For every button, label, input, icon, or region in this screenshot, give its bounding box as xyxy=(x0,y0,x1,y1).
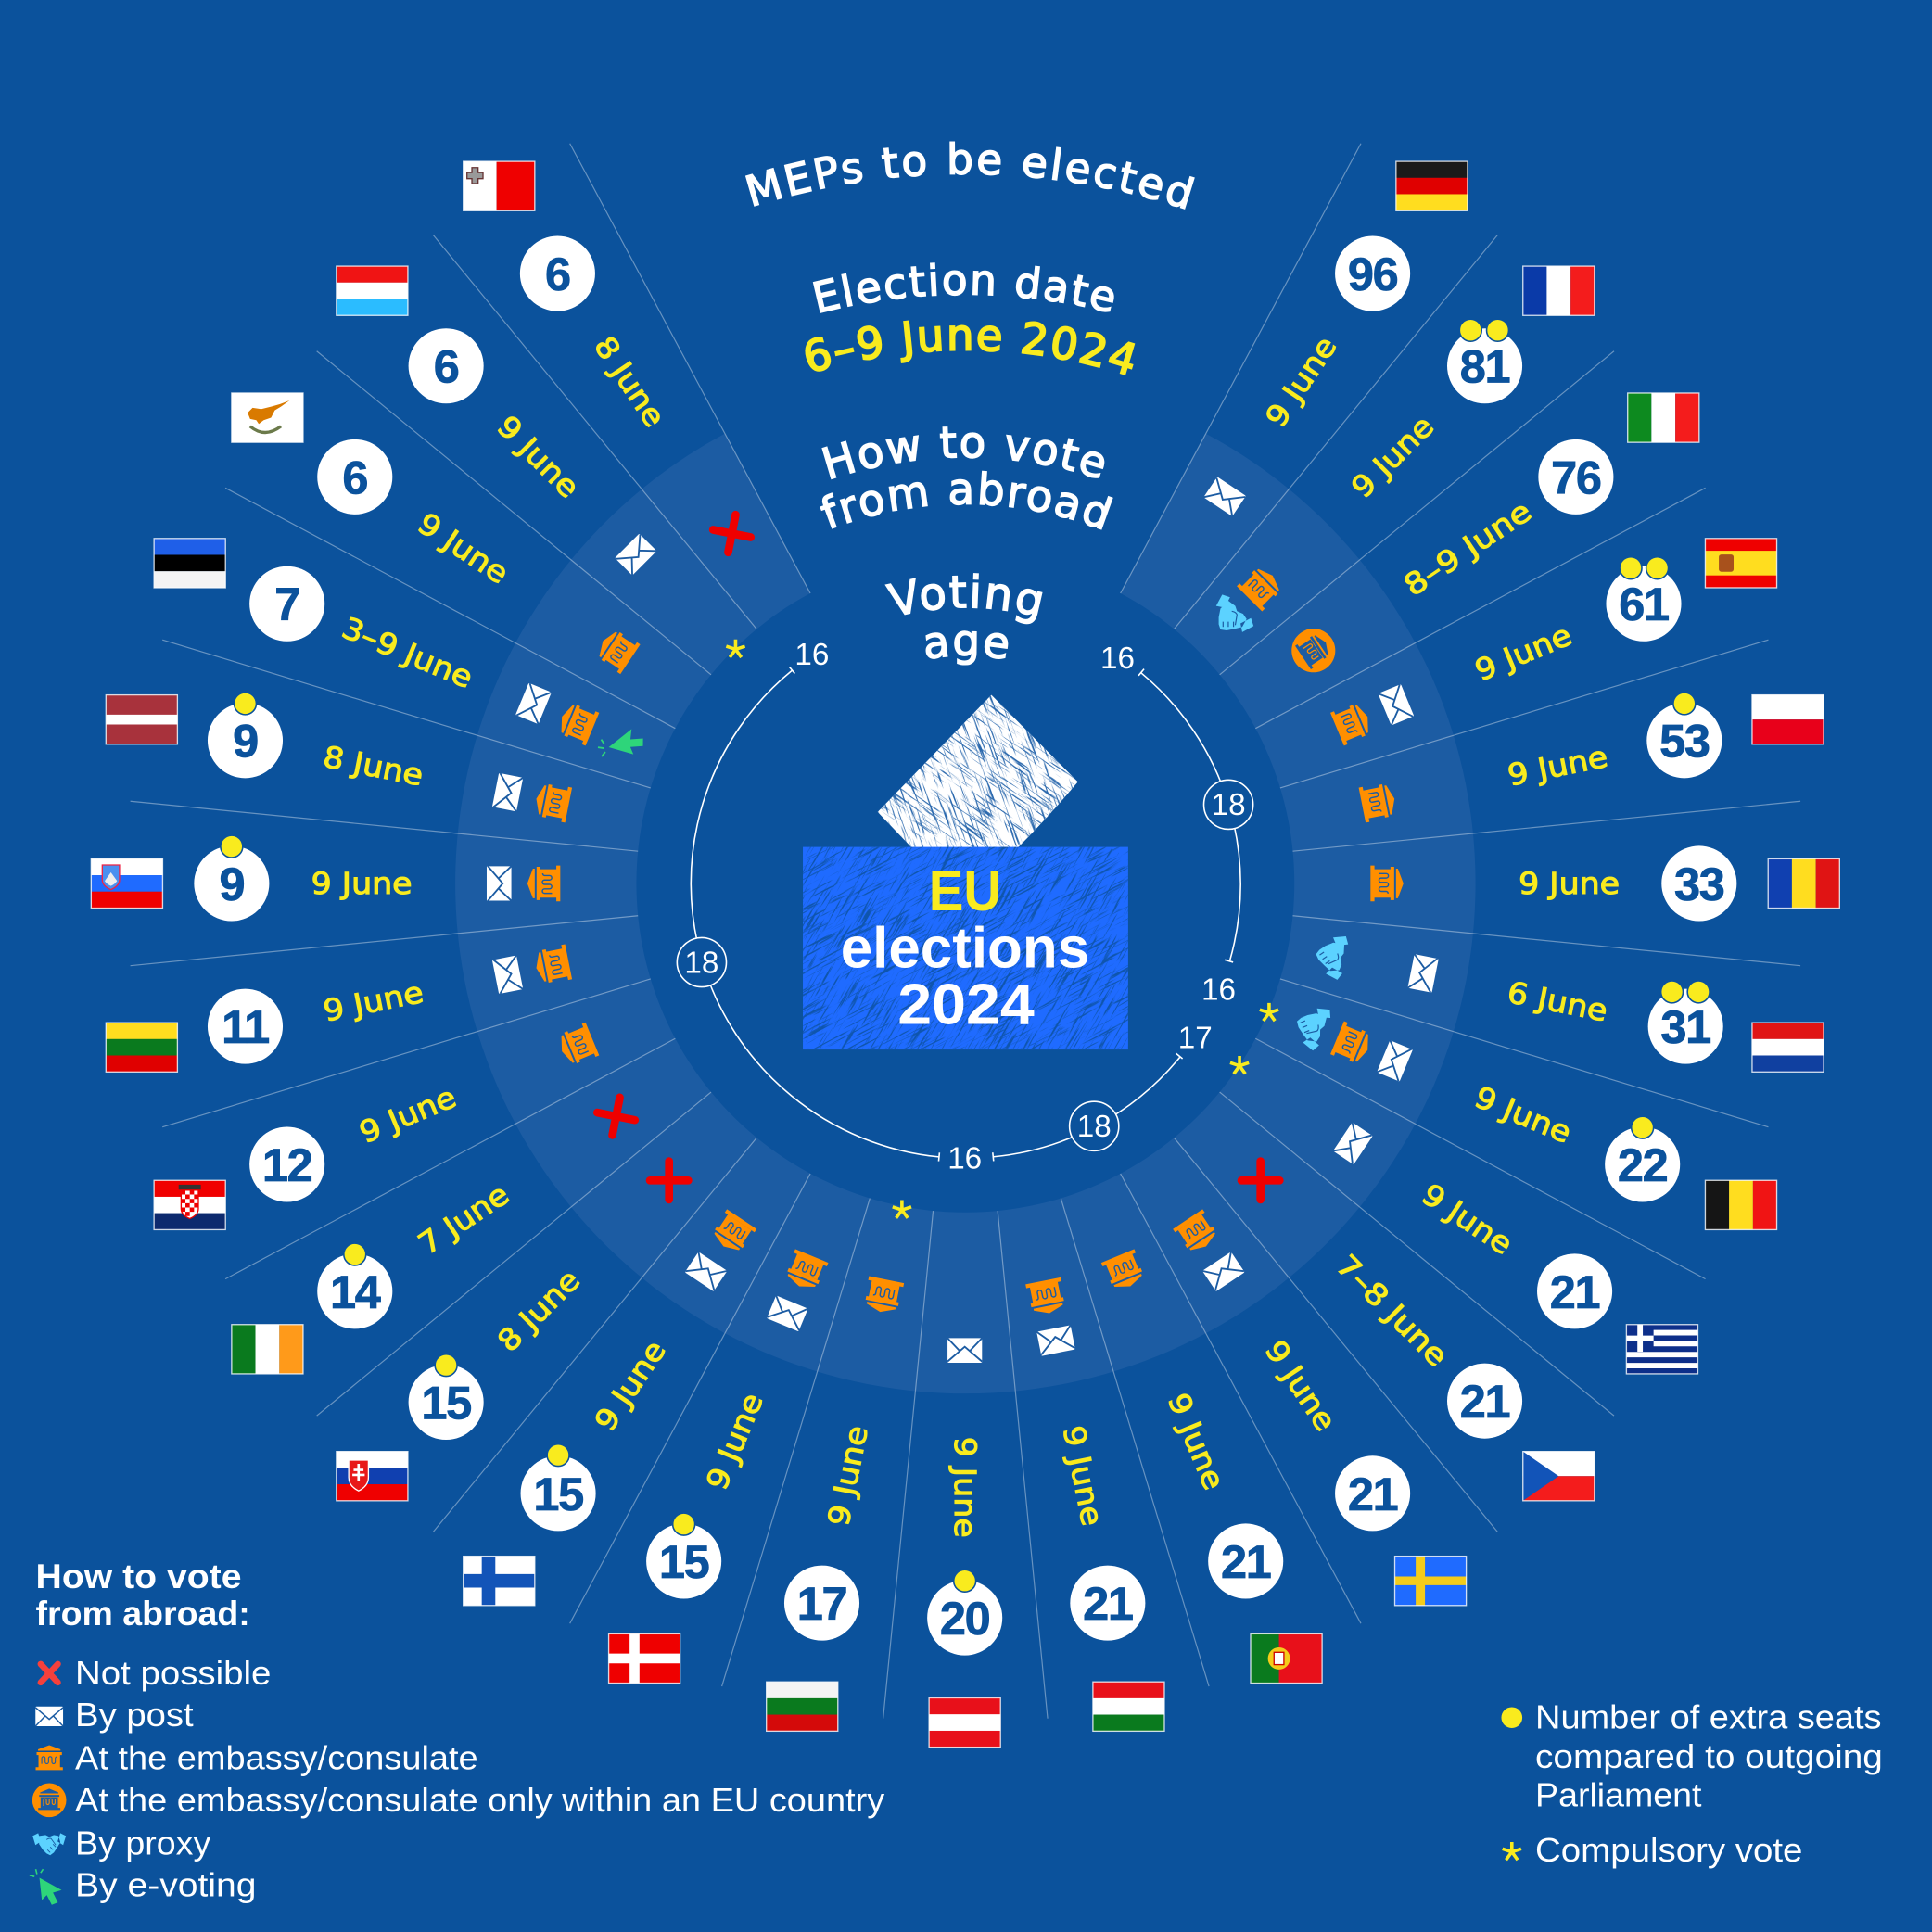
legend heading xyxy=(36,1557,250,1633)
icon: not possible xyxy=(713,515,751,553)
flag: Cyprus xyxy=(232,393,303,442)
wedge: Portugal xyxy=(1101,1249,1322,1684)
extra seat xyxy=(673,1513,695,1535)
seats: 11 xyxy=(208,989,283,1064)
flag: Spain xyxy=(1705,539,1777,588)
seats: 9: 9 xyxy=(233,715,258,768)
icon: embassy xyxy=(1237,563,1285,612)
icon: by post xyxy=(1377,1040,1413,1082)
age label 16: 16 xyxy=(1100,642,1135,676)
seats: 96: 96 xyxy=(1348,248,1398,300)
wedge: Bulgaria xyxy=(767,1201,911,1731)
heading: MEPs to be elected: MEPs to be elected xyxy=(745,141,1195,210)
age badge 18 xyxy=(1204,780,1253,829)
heading: Election date: Election date xyxy=(812,262,1114,313)
wedge: Belgium xyxy=(1260,999,1777,1229)
legend heading: How to vote xyxy=(36,1557,241,1595)
age badge 18: 18 xyxy=(1077,1110,1112,1144)
age badge 18: 18 xyxy=(684,946,718,980)
age label 17: 17 xyxy=(1178,1021,1213,1055)
voting age arc chart xyxy=(677,638,1253,1176)
icon: by post xyxy=(492,955,523,994)
seats: 53: 53 xyxy=(1659,715,1710,768)
date: 9 June: 9 June xyxy=(490,409,587,505)
icon: embassy xyxy=(782,1249,828,1293)
box title: EU elections 2024: 2024 xyxy=(897,973,1035,1037)
flag: Estonia xyxy=(154,539,225,588)
legend item: compulsory vote: Compulsory vote xyxy=(1535,1832,1802,1869)
icon: embassy xyxy=(1101,1249,1147,1293)
wedge: Ireland xyxy=(232,1098,635,1374)
seats: 22 xyxy=(1605,1126,1680,1202)
age label 16: 16 xyxy=(1201,973,1236,1008)
icon: not possible xyxy=(597,1098,635,1135)
seats: 61: 61 xyxy=(1619,578,1669,630)
wedge: Sweden xyxy=(1173,1209,1467,1606)
seats: 6 xyxy=(317,439,392,515)
date: 9 June: 9 June xyxy=(1416,1176,1519,1262)
box title: EU elections 2024 xyxy=(841,859,1089,1037)
seats: 33 xyxy=(1661,845,1736,921)
wedge: Cyprus xyxy=(232,393,641,674)
legend item: by proxy: By proxy xyxy=(75,1824,210,1862)
seats: 20: 20 xyxy=(940,1592,990,1645)
flag: Slovenia xyxy=(91,858,162,909)
seats: 76: 76 xyxy=(1551,451,1601,503)
date: 9 June: 9 June xyxy=(1344,409,1441,505)
seats: 6 xyxy=(520,236,595,311)
wedge: Italy xyxy=(1283,393,1699,680)
date: 9 June: 9 June xyxy=(1161,1388,1232,1494)
flag: Hungary xyxy=(1093,1682,1164,1731)
date: 3–9 June: 3–9 June xyxy=(337,610,478,695)
flag: Germany xyxy=(1396,161,1468,210)
date: 9 June: 9 June xyxy=(311,866,413,901)
seats: 81: 81 xyxy=(1460,340,1510,393)
icon: by post xyxy=(1378,684,1414,726)
heading: Voting: Voting xyxy=(884,573,1042,625)
icon: by post xyxy=(1203,477,1246,516)
flag: Lithuania xyxy=(106,1023,177,1072)
legend item: embassy within EU: At the embassy/consulate only within an EU country xyxy=(75,1782,884,1819)
seats: 53 xyxy=(1646,703,1722,778)
seats: 21 xyxy=(1537,1253,1612,1328)
icon: compulsory vote xyxy=(726,640,745,657)
date: 9 June: 9 June xyxy=(321,974,426,1029)
legend item: by e-voting: By e-voting xyxy=(75,1866,256,1903)
seats: 9 xyxy=(194,845,269,921)
seats: 11: 11 xyxy=(222,1000,269,1053)
icon: embassy xyxy=(533,944,572,985)
wedge: Germany xyxy=(1203,161,1468,516)
seats: 15: 15 xyxy=(533,1468,583,1520)
icon: embassy xyxy=(1330,700,1375,745)
flag: Denmark xyxy=(609,1633,680,1684)
seats: 21 xyxy=(1070,1566,1145,1641)
ballot paper xyxy=(877,695,1078,847)
flag: Latvia xyxy=(106,695,177,744)
icon: embassy xyxy=(1359,782,1398,822)
flag: Finland xyxy=(464,1557,535,1606)
flag: Malta xyxy=(464,161,535,210)
extra seats xyxy=(1661,981,1710,1003)
flag: Belgium xyxy=(1705,1180,1777,1229)
age badge 18: 18 xyxy=(1212,788,1246,822)
icon: embassy xyxy=(527,866,560,901)
icon: e-voting xyxy=(595,719,647,769)
icon: compulsory vote xyxy=(1230,1056,1249,1074)
flag: Luxembourg xyxy=(337,266,408,315)
flag: Romania xyxy=(1768,858,1839,909)
icon: embassy xyxy=(555,700,599,745)
date: 9 June: 9 June xyxy=(412,505,515,591)
seats: 15: 15 xyxy=(421,1376,471,1429)
date: 9 June: 9 June xyxy=(1258,330,1343,433)
extra seat xyxy=(435,1354,457,1377)
extra seat xyxy=(221,835,243,858)
seats: 33: 33 xyxy=(1674,858,1724,910)
date: 7–8 June: 7–8 June xyxy=(1329,1248,1455,1374)
legend heading: from abroad: xyxy=(36,1594,250,1633)
seats: 21: 21 xyxy=(1083,1577,1133,1630)
flag: Slovakia xyxy=(337,1452,408,1501)
icon: embassy xyxy=(862,1277,904,1316)
seats: 6: 6 xyxy=(434,340,459,393)
date: 8–9 June: 8–9 June xyxy=(1397,493,1538,604)
icon: embassy within EU only xyxy=(1283,620,1343,680)
ballot box xyxy=(803,847,1128,1049)
extra seat xyxy=(344,1243,366,1265)
seats: 61 xyxy=(1606,566,1682,642)
seats: 15 xyxy=(646,1523,721,1598)
date: 9 June: 9 June xyxy=(1056,1423,1110,1529)
extra seat xyxy=(1632,1116,1654,1138)
wedge: Slovenia xyxy=(91,835,560,921)
wedge: Croatia xyxy=(154,1023,599,1229)
legend: how to vote from abroad xyxy=(30,1557,884,1905)
age label 16: 16 xyxy=(794,638,829,672)
extra seat xyxy=(1673,693,1696,715)
heading: age: age xyxy=(925,630,1009,666)
date: 9 June: 9 June xyxy=(1470,617,1577,688)
extra seats xyxy=(1459,319,1508,341)
seats: 21: 21 xyxy=(1460,1375,1510,1428)
date: 8 June: 8 June xyxy=(490,1263,587,1359)
seats: 20 xyxy=(927,1581,1002,1656)
icon: by post xyxy=(685,1252,727,1291)
seats: 31: 31 xyxy=(1660,1000,1710,1053)
heading: from abroad: from abroad xyxy=(820,471,1113,530)
icon: embassy xyxy=(1370,866,1404,901)
icon: by post xyxy=(767,1295,808,1331)
ring: how to vote from abroad band xyxy=(455,434,1476,1393)
wedge: Latvia xyxy=(106,693,572,822)
heading: How to vote: How to vote xyxy=(821,426,1105,480)
wedge: Austria xyxy=(927,1338,1002,1748)
extra seat xyxy=(547,1444,569,1467)
icon: proxy xyxy=(1204,592,1256,644)
icon: proxy xyxy=(1312,932,1350,981)
icon: by post xyxy=(1333,1123,1373,1164)
box title: EU elections 2024: elections xyxy=(841,917,1089,981)
age label 16: 16 xyxy=(947,1142,982,1176)
seats: 22: 22 xyxy=(1618,1138,1668,1191)
flag: Croatia xyxy=(154,1180,225,1229)
icon: by post xyxy=(487,866,512,901)
flag: Ireland xyxy=(232,1325,303,1374)
extra seat xyxy=(235,693,256,715)
age badge 18 xyxy=(677,937,726,987)
icon: compulsory vote xyxy=(1260,1003,1278,1021)
icon: by post xyxy=(515,683,552,724)
wedge: Poland xyxy=(1359,693,1824,822)
icon: by post xyxy=(492,773,523,811)
legend item: extra seats xyxy=(1501,1699,1883,1813)
date: 9 June: 9 June xyxy=(1519,866,1620,901)
extra seat xyxy=(954,1570,976,1592)
seats: 21 xyxy=(1208,1523,1283,1598)
seats: 21: 21 xyxy=(1221,1535,1271,1588)
date: 9 June: 9 June xyxy=(1469,1079,1577,1150)
wedge: Spain xyxy=(1330,539,1777,745)
seats: 6: 6 xyxy=(342,451,367,503)
seats: 9: 9 xyxy=(219,858,244,910)
icon: embassy xyxy=(593,626,641,674)
seats: 31 xyxy=(1648,989,1723,1064)
date: 9 June: 9 June xyxy=(1258,1334,1343,1437)
wedge: Finland xyxy=(464,1209,756,1606)
date: 8 June: 8 June xyxy=(587,330,672,433)
seats: 21 xyxy=(1447,1364,1522,1439)
wedge: Slovakia xyxy=(337,1162,688,1501)
wedge: Denmark xyxy=(609,1249,828,1684)
icon: embassy xyxy=(1025,1277,1067,1316)
date: 8 June: 8 June xyxy=(320,739,426,793)
date: 9 June: 9 June xyxy=(588,1334,673,1437)
icon: embassy xyxy=(1330,1021,1375,1067)
seats: 7 xyxy=(249,566,324,642)
flag: Portugal xyxy=(1251,1633,1322,1684)
wedge: Romania xyxy=(1370,845,1839,921)
date: 9 June: 9 June xyxy=(699,1388,770,1494)
legend item: embassy: At the embassy/consulate xyxy=(75,1740,478,1777)
flag: Italy xyxy=(1628,393,1699,442)
icon: compulsory vote xyxy=(893,1201,911,1218)
icon: by post xyxy=(947,1338,982,1363)
wedge: Netherlands xyxy=(1312,932,1824,1072)
flag: Netherlands xyxy=(1752,1023,1824,1072)
legend item: by post: By post xyxy=(75,1697,194,1734)
seats: 15: 15 xyxy=(659,1535,709,1588)
age badge 18 xyxy=(1070,1101,1119,1150)
wedge: France xyxy=(1204,266,1595,644)
icon: embassy xyxy=(1173,1209,1221,1256)
seats: 12 xyxy=(249,1126,324,1202)
flag: Czechia xyxy=(1523,1452,1595,1501)
seats: 15 xyxy=(409,1365,484,1440)
flag: Poland xyxy=(1752,695,1824,744)
legend item: extra seats: Parliament xyxy=(1535,1776,1701,1813)
flag: Austria xyxy=(929,1697,1000,1748)
box title: EU elections 2024: EU xyxy=(929,859,1001,923)
icon: by post xyxy=(1407,954,1439,993)
seats: 17 xyxy=(784,1566,859,1641)
legend item: extra seats: compared to outgoing xyxy=(1535,1738,1883,1775)
icon: by post xyxy=(1202,1252,1245,1291)
seats: 17: 17 xyxy=(797,1577,846,1630)
icon: not possible xyxy=(1241,1162,1279,1200)
seats: 21: 21 xyxy=(1348,1468,1398,1520)
seats: 12: 12 xyxy=(262,1138,312,1191)
icon: embassy xyxy=(533,782,572,822)
icon: not possible xyxy=(650,1162,688,1200)
flag: Bulgaria xyxy=(767,1682,838,1731)
legend item: not possible: Not possible xyxy=(75,1655,271,1692)
seats: 76 xyxy=(1538,439,1613,515)
date: 9 June: 9 June xyxy=(820,1423,875,1529)
date: 9 June: 9 June xyxy=(947,1437,983,1538)
seats: 15 xyxy=(521,1455,596,1531)
wedge: Estonia xyxy=(154,539,647,769)
seats: 7: 7 xyxy=(274,578,299,630)
icon: proxy xyxy=(1289,999,1333,1052)
wedge: Hungary xyxy=(1025,1277,1164,1731)
heading: 6–9 June 2024: 6–9 June 2024 xyxy=(805,321,1135,375)
seats: 6 xyxy=(409,328,484,403)
date: 7 June: 7 June xyxy=(412,1176,515,1262)
date: 9 June: 9 June xyxy=(1505,739,1610,793)
date: 6 June: 6 June xyxy=(1505,974,1610,1029)
seats: 9 xyxy=(208,703,283,778)
icon: embassy xyxy=(555,1023,599,1068)
date: 9 June: 9 June xyxy=(354,1079,461,1150)
wedge: Czechia xyxy=(1241,1162,1595,1501)
wedge: Greece xyxy=(1230,1056,1697,1374)
seats: 14: 14 xyxy=(330,1265,381,1318)
flag: France xyxy=(1523,266,1595,315)
flag: Sweden xyxy=(1395,1557,1467,1606)
flag: Greece xyxy=(1626,1325,1697,1374)
seats: 21: 21 xyxy=(1550,1265,1600,1318)
wedge: Malta xyxy=(464,161,751,657)
legend item: extra seats: Number of extra seats xyxy=(1535,1699,1882,1736)
seats: 81 xyxy=(1447,328,1522,403)
seats: 96 xyxy=(1335,236,1410,311)
icon: by post xyxy=(615,534,656,576)
wedge: Lithuania xyxy=(106,944,572,1072)
seats: 14 xyxy=(317,1253,392,1328)
extra seats xyxy=(1620,557,1669,579)
seats: 21 xyxy=(1335,1455,1410,1531)
legend: extra seats and compulsory vote xyxy=(1501,1699,1883,1869)
icon: embassy xyxy=(708,1209,756,1256)
seats: 6: 6 xyxy=(545,248,570,300)
icon: by post xyxy=(1036,1325,1075,1356)
wedge: Luxembourg xyxy=(337,266,656,576)
